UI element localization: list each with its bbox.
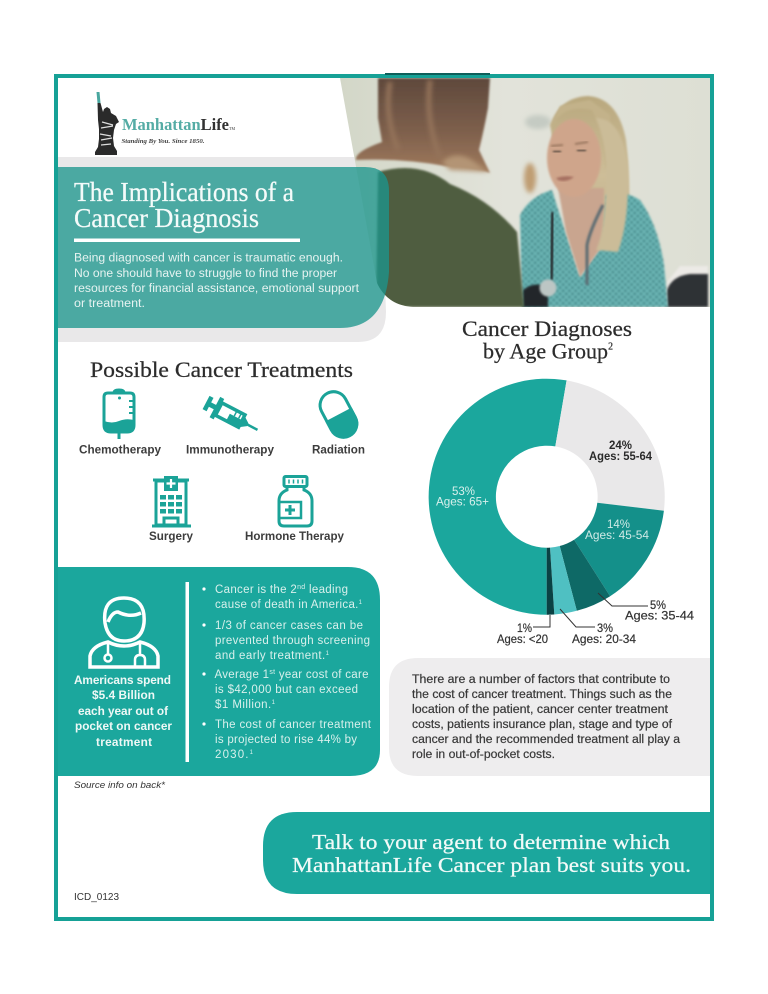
panel: intro (58, 167, 389, 328)
title underline (74, 238, 300, 242)
label: 45-54: Ages: 45-54 (585, 530, 650, 542)
panel: statistics (58, 567, 380, 776)
blouse (520, 190, 668, 307)
title: Cancer Diagnosis (74, 203, 259, 233)
cost factors text: the cost of cancer treatment. Things such as the (412, 689, 672, 701)
bullet list: The cost of cancer treatment (215, 719, 372, 731)
chart title: Cancer Diagnoses (462, 316, 632, 341)
call to action text (292, 830, 691, 877)
label: 35-44 (625, 600, 695, 622)
cost factors text (412, 674, 681, 761)
label: 65+ (436, 486, 489, 508)
bullet list: 1 (359, 600, 363, 606)
skin neck and chest (558, 188, 604, 277)
spending callout: Americans spend (74, 673, 171, 687)
label: 35-44: Ages: 35-44 (625, 610, 695, 622)
segment: 20-34 (550, 546, 577, 614)
label: 45-54 (585, 519, 650, 542)
label: radiation: Radiation (312, 444, 365, 456)
intro text: resources for financial assistance, emotional support (74, 283, 360, 295)
page frame (56, 76, 712, 919)
spending callout: treatment (96, 735, 152, 749)
bullet list: 1 (250, 750, 254, 756)
bullet list: is projected to rise 44% by (215, 734, 357, 746)
icon: immunotherapy syringe (203, 393, 263, 440)
stethoscope (587, 205, 603, 285)
icon: radiation capsule (314, 386, 363, 444)
source note: Source info on back* (74, 780, 165, 791)
donut chart: diagnoses by age group (429, 379, 695, 646)
dark undershirt (523, 284, 548, 307)
label: 55-64 (589, 440, 653, 463)
bullet list: nd (297, 584, 305, 591)
bullet list: and early treatment. (215, 650, 325, 662)
bullet list: is $42,000 but can exceed (215, 684, 358, 696)
cost factors text: role in out-of-pocket costs. (412, 749, 555, 761)
bullet list: Cancer is the 2 (215, 584, 297, 596)
grey backing panel (58, 157, 386, 342)
bullet list (202, 584, 372, 761)
label: 65+: 53% (452, 486, 475, 498)
chart title: 2 (608, 342, 613, 352)
icon: doctor (90, 598, 158, 667)
patient hair (356, 78, 490, 173)
segment: under 20 (547, 548, 554, 615)
logo tm: TM (229, 126, 235, 131)
frame right edge (710, 76, 714, 919)
segment: 35-44 (560, 540, 610, 611)
call to action text: Talk to your agent to determine which (312, 830, 670, 854)
segment: 65+ (429, 379, 567, 615)
spending callout: each year out of (78, 704, 168, 718)
label: 20-34: Ages: 20-34 (572, 634, 637, 646)
chart title: by Age Group (483, 338, 610, 364)
leader lines (533, 593, 648, 627)
bullet list: Average 1 (214, 669, 269, 681)
cost factors text: location of the patient, cancer center treatment (412, 704, 669, 716)
spending callout: pocket on cancer (75, 719, 172, 733)
photo: doctor with patient (340, 78, 710, 307)
spending callout: $5.4 Billion (92, 688, 155, 702)
intro text (74, 252, 360, 310)
label: under 20 (497, 623, 548, 646)
bullet list: leading (305, 584, 348, 596)
bullet list: st (269, 669, 275, 676)
intro text: No one should have to struggle to find the proper (74, 268, 337, 280)
label: 20-34: 3% (597, 623, 613, 635)
patient sweater (376, 168, 524, 307)
logo tagline: Standing By You. Since 1850. (122, 138, 205, 145)
bullet list: cause of death in America. (215, 599, 358, 611)
label: 55-64: 24% (609, 440, 632, 452)
icon: hormone therapy bottle (279, 476, 312, 526)
title: The Implications of a (74, 177, 294, 207)
icon: statue of liberty (95, 92, 119, 155)
panel: call to action (263, 812, 710, 894)
bullet list: year cost of care (275, 669, 368, 681)
icon: surgery hospital (152, 476, 191, 526)
label: hormone therapy: Hormone Therapy (245, 531, 345, 543)
title (74, 177, 294, 233)
segment: 45-54 (574, 503, 664, 596)
logo wordmark: ManhattanLife (122, 115, 229, 134)
logo (95, 92, 235, 155)
label: 20-34 (572, 623, 637, 646)
label: surgery: Surgery (149, 531, 194, 543)
label: under 20: 1% (517, 623, 532, 635)
label: 65+: Ages: 65+ (436, 496, 489, 508)
vertical divider (186, 582, 189, 762)
label: under 20: Ages: <20 (497, 634, 548, 646)
cost factors text: cancer and the recommended treatment all play a (412, 734, 681, 746)
label: 45-54: 14% (607, 519, 630, 531)
cost factors text: costs, patients insurance plan, stage and type of (412, 719, 673, 731)
label: immunotherapy: Immunotherapy (186, 444, 275, 456)
face (547, 119, 601, 197)
cost factors text: There are a number of factors that contribute to (412, 674, 670, 686)
call to action text: ManhattanLife Cancer plan best suits you. (292, 853, 691, 877)
form code: ICD_0123 (74, 892, 119, 903)
bullet list: $1 Million. (215, 699, 271, 711)
doctor hair back (549, 94, 630, 225)
bullet list: 1/3 of cancer cases can be (215, 620, 363, 632)
bullet list: 1 (326, 651, 330, 657)
bullet list: 1 (272, 700, 276, 706)
segment: 55-64 (555, 380, 665, 511)
icon: chemotherapy IV bag (104, 390, 135, 439)
spending callout (74, 673, 172, 749)
panel: cost factors (389, 658, 710, 776)
label: 35-44: 5% (650, 600, 666, 612)
chart title (462, 316, 632, 364)
top edge shadow on frame (385, 73, 490, 75)
heading: possible cancer treatments: Possible Cancer Treatments (90, 357, 353, 382)
intro text: or treatment. (74, 298, 145, 310)
bullet list: prevented through screening (215, 635, 370, 647)
intro text: Being diagnosed with cancer is traumatic enough. (74, 252, 343, 264)
label: 55-64: Ages: 55-64 (589, 451, 653, 463)
label: chemotherapy: Chemotherapy (79, 444, 162, 456)
bullet list: 2030. (215, 749, 248, 761)
